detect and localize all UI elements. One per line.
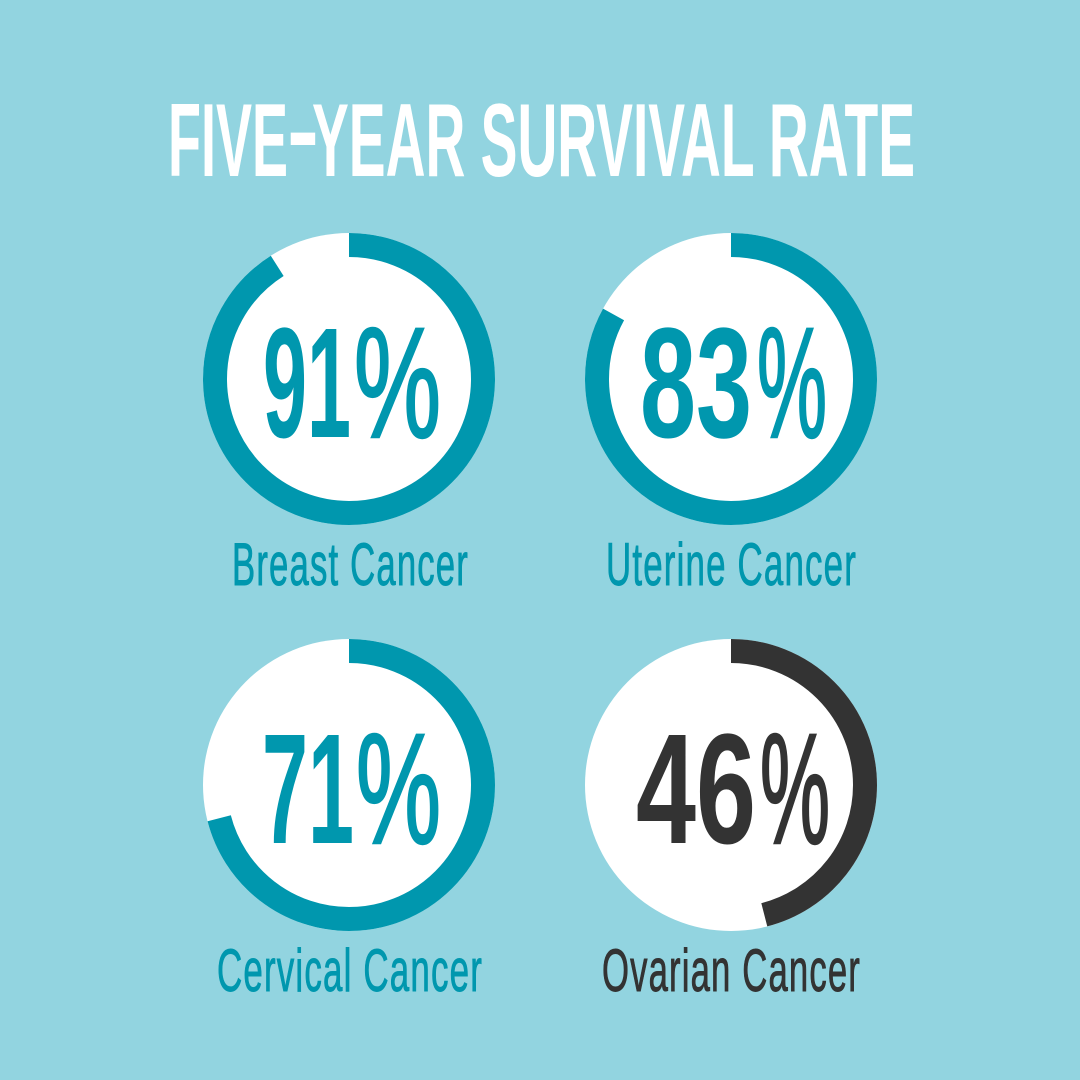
donut chart: 91%	[203, 233, 495, 525]
panel: cervical cancer	[203, 639, 495, 1004]
donut chart: 71%	[203, 639, 495, 931]
value: 71%: 71	[262, 702, 354, 877]
label: Ovarian Cancer: Ovarian Cancer	[602, 937, 861, 1004]
panel: ovarian cancer	[585, 639, 877, 1004]
value: 83%: 83	[640, 296, 752, 471]
label: Uterine Cancer: Uterine Cancer	[606, 531, 857, 598]
value: 46%: 46	[636, 702, 756, 877]
label: Cervical Cancer: Cervical Cancer	[217, 937, 483, 1004]
label: Breast Cancer: Breast Cancer	[232, 531, 469, 598]
panel: uterine cancer	[585, 233, 877, 598]
title: FIVE	[168, 83, 288, 199]
value: 46%: %	[760, 702, 830, 877]
panel: breast cancer	[203, 233, 495, 598]
value: 91%: 91	[263, 296, 351, 471]
donut chart: 46%	[585, 639, 877, 931]
value: 83%: %	[757, 296, 827, 471]
donut chart: 83%	[585, 233, 877, 525]
value: 91%: %	[354, 296, 441, 471]
value: 71%: %	[356, 702, 441, 877]
title: -	[287, 73, 319, 189]
title	[168, 73, 915, 199]
